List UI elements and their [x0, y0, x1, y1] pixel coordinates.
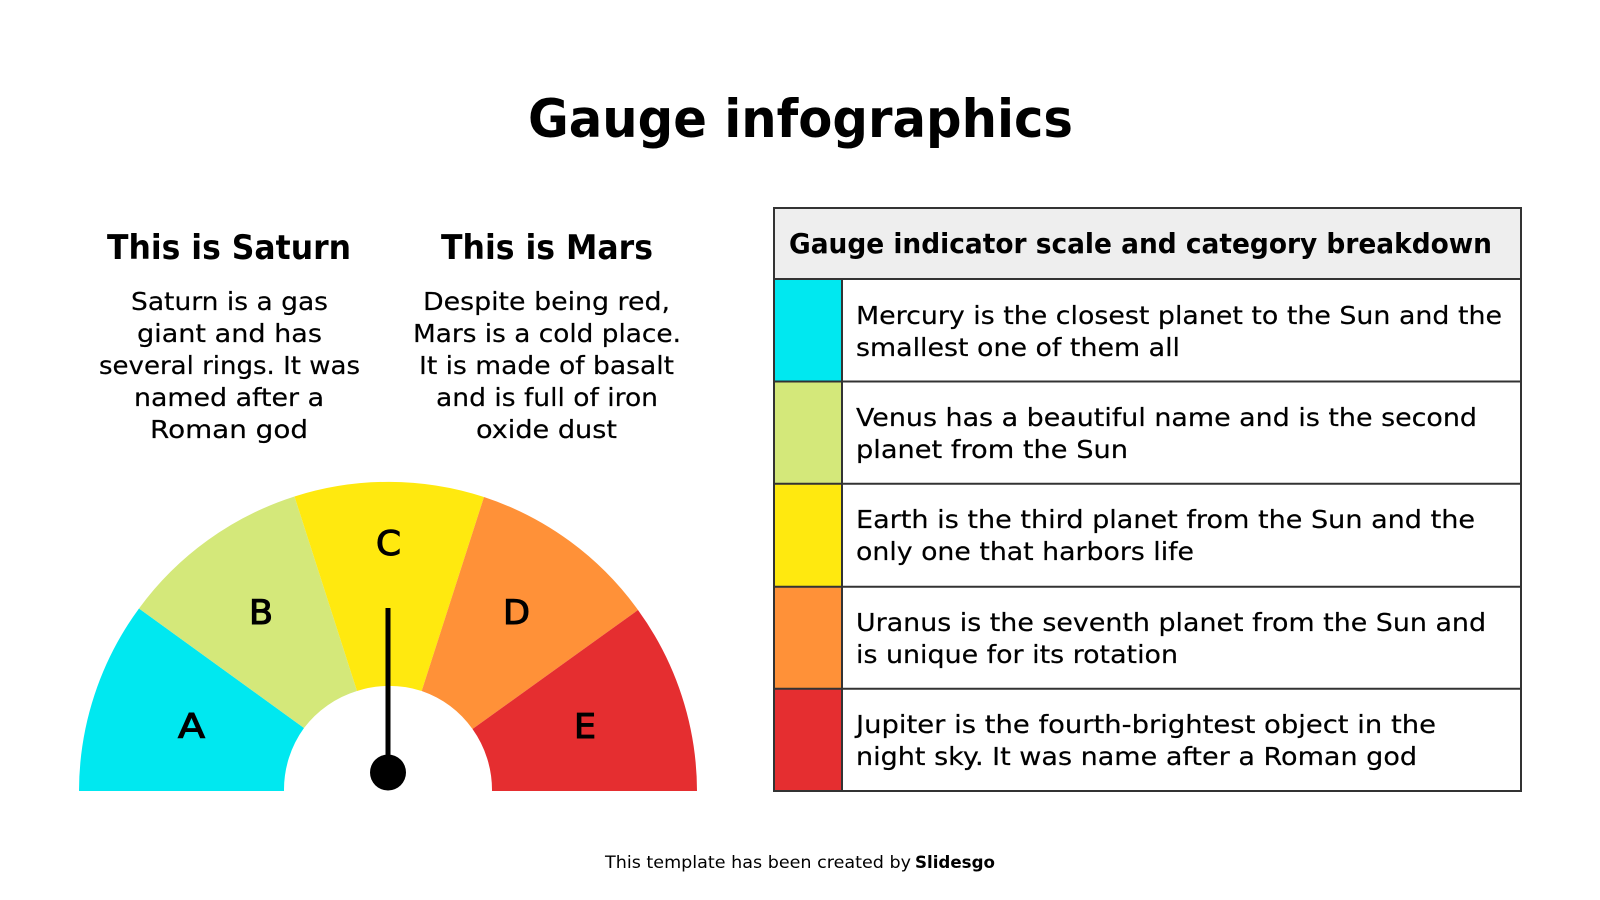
swatch: orange — [774, 587, 842, 689]
gauge segment E — [472, 610, 697, 791]
heading: This is Mars: This is Mars — [441, 228, 653, 268]
row text: Jupiter: Jupiter is the fourth-brightest object in the — [854, 710, 1436, 739]
gauge segment A — [79, 608, 304, 791]
gauge needle — [370, 608, 406, 790]
chart: gauge — [79, 482, 697, 791]
label B: B — [249, 593, 273, 633]
description: Mars: and is full of iron — [436, 383, 658, 412]
description: Saturn: several rings. It was — [99, 351, 360, 380]
label C: C — [376, 524, 401, 564]
text block: Saturn — [99, 228, 360, 444]
gauge segment D — [422, 497, 638, 729]
row text: Earth — [856, 505, 1475, 566]
row text: Mercury — [856, 301, 1502, 362]
row text: Earth: only one that harbors life — [856, 537, 1194, 566]
row text: Jupiter — [854, 710, 1436, 771]
table header — [774, 208, 1521, 279]
swatch: green — [774, 382, 842, 484]
row text: Venus: Venus has a beautiful name and is the second — [856, 403, 1477, 432]
table grid — [774, 208, 1521, 791]
description: Mars: Despite being red, — [423, 287, 670, 316]
description: Mars: Mars is a cold place. — [413, 319, 681, 348]
footer credit: This template has been created by — [604, 853, 911, 873]
row text: Venus — [856, 403, 1477, 464]
label D: D — [503, 593, 530, 633]
description: Mars: It is made of basalt — [419, 351, 674, 380]
swatch: red — [774, 689, 842, 791]
description: Saturn — [99, 287, 360, 444]
row text: Uranus — [856, 608, 1486, 669]
swatch: cyan — [774, 279, 842, 382]
label E: E — [574, 707, 596, 747]
swatch: yellow — [774, 484, 842, 587]
table header: Gauge indicator scale and category breakdown — [789, 227, 1492, 260]
description: Mars — [413, 287, 681, 444]
row text: Venus: planet from the Sun — [856, 435, 1128, 464]
row text: Earth: Earth is the third planet from the Sun and the — [856, 505, 1475, 534]
row text: Jupiter: night sky. It was name after a Roman god — [856, 742, 1417, 771]
description: Saturn: Roman god — [150, 415, 308, 444]
table: gauge indicator scale — [774, 208, 1521, 791]
row text: Uranus: is unique for its rotation — [856, 640, 1178, 669]
gauge segment C — [294, 482, 484, 691]
text block: Mars — [413, 228, 681, 444]
label A: A — [178, 707, 205, 747]
title: Gauge infographics — [528, 89, 1073, 150]
row text: Mercury: smallest one of them all — [856, 333, 1180, 362]
description: Mars: oxide dust — [476, 415, 617, 444]
row text: Uranus: Uranus is the seventh planet from the Sun and — [856, 608, 1486, 637]
footer credit: Slidesgo — [915, 853, 995, 873]
description: Saturn: giant and has — [137, 319, 322, 348]
gauge segment B — [139, 496, 357, 728]
description: Saturn: Saturn is a gas — [131, 287, 328, 316]
heading: This is Saturn: This is Saturn — [107, 228, 351, 268]
description: Saturn: named after a — [134, 383, 324, 412]
row text: Mercury: Mercury is the closest planet to the Sun and the — [856, 301, 1502, 330]
